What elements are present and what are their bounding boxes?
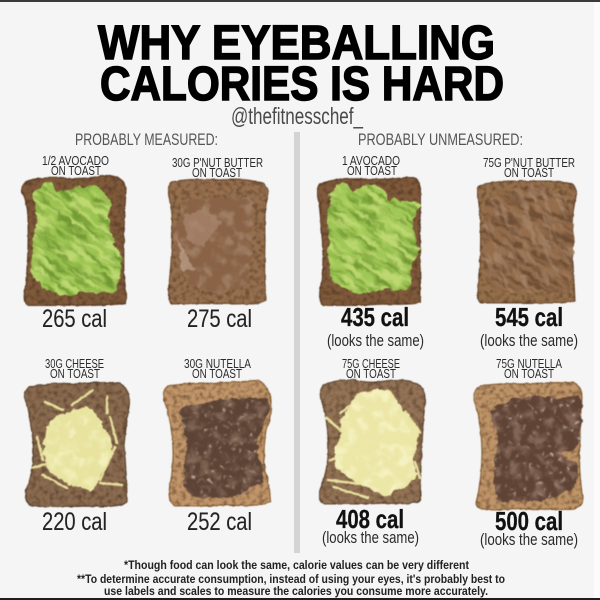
footnotes: *Though food can look the same, calorie values can be very different (124, 558, 469, 572)
card: half avocado toast (20, 156, 128, 327)
panel: probably unmeasured (316, 134, 584, 548)
label: ON TOAST (346, 367, 396, 381)
cheese shreds (326, 398, 420, 498)
label: ON TOAST (504, 166, 554, 180)
card: 30g peanut butter toast (165, 156, 268, 333)
note: (looks the same) (480, 531, 578, 549)
heading: probably unmeasured: PROBABLY UNMEASURED: (358, 131, 523, 149)
calories: 408 cal (336, 504, 404, 534)
footnotes: use labels and scales to measure the calories you consume more accurately. (104, 584, 488, 598)
label (172, 156, 263, 180)
toast with avocado (20, 174, 128, 308)
label: 1/2 AVOCADO (42, 154, 109, 168)
label: 1 AVOCADO (342, 154, 400, 168)
cheese shreds (33, 390, 122, 488)
calories: 500 cal (495, 506, 563, 536)
toast with nutella (163, 380, 275, 506)
calories: 545 cal (495, 302, 563, 332)
handle: @thefitnesschef_ (231, 103, 364, 129)
label: 30G P'NUT BUTTER (172, 156, 263, 170)
footnotes: **To determine accurate consumption, instead of using your eyes, it's probably best to (77, 572, 505, 586)
label (483, 156, 575, 180)
calories: 435 cal (341, 302, 409, 332)
label (42, 154, 109, 178)
calories: 220 cal (42, 508, 107, 536)
label: ON TOAST (192, 166, 242, 180)
label (45, 357, 104, 381)
calories: 265 cal (42, 305, 107, 333)
label (496, 357, 563, 381)
note: (looks the same) (322, 529, 419, 547)
center divider (294, 132, 300, 553)
calories: 275 cal (187, 305, 252, 333)
note: (looks the same) (480, 332, 578, 350)
label (342, 357, 400, 381)
label: 30G CHEESE (45, 357, 104, 371)
footnotes (77, 558, 505, 598)
title: WHY EYEBALLING (98, 17, 495, 70)
toast with cheese (319, 380, 426, 504)
card: 30g cheese toast (24, 357, 130, 536)
card: 30g nutella toast (163, 357, 275, 536)
toast with nutella (474, 382, 585, 510)
calories: 252 cal (187, 508, 252, 536)
toast with peanut butter (476, 179, 578, 305)
toast with avocado (316, 176, 422, 307)
card: 1 avocado toast (316, 156, 424, 350)
label (184, 357, 252, 381)
toast with peanut butter (165, 179, 268, 304)
label: ON TOAST (504, 367, 554, 381)
title (98, 17, 504, 111)
label: 75G P'NUT BUTTER (483, 156, 575, 170)
label: 75G CHEESE (342, 357, 400, 371)
label: ON TOAST (50, 367, 100, 381)
card: 75g nutella toast (474, 357, 585, 549)
label: 30G NUTELLA (184, 357, 252, 371)
label: ON TOAST (51, 164, 101, 178)
panel: probably measured (20, 134, 273, 530)
label: ON TOAST (347, 164, 397, 178)
card: 75g cheese toast (319, 357, 426, 547)
label (342, 154, 400, 178)
label: ON TOAST (192, 367, 242, 381)
title: CALORIES IS HARD (100, 58, 504, 111)
label: 75G NUTELLA (496, 357, 563, 371)
card: 75g peanut butter toast (476, 158, 578, 350)
toast with cheese (24, 382, 130, 507)
heading: probably measured: PROBABLY MEASURED: (75, 131, 218, 149)
note: (looks the same) (327, 332, 424, 350)
